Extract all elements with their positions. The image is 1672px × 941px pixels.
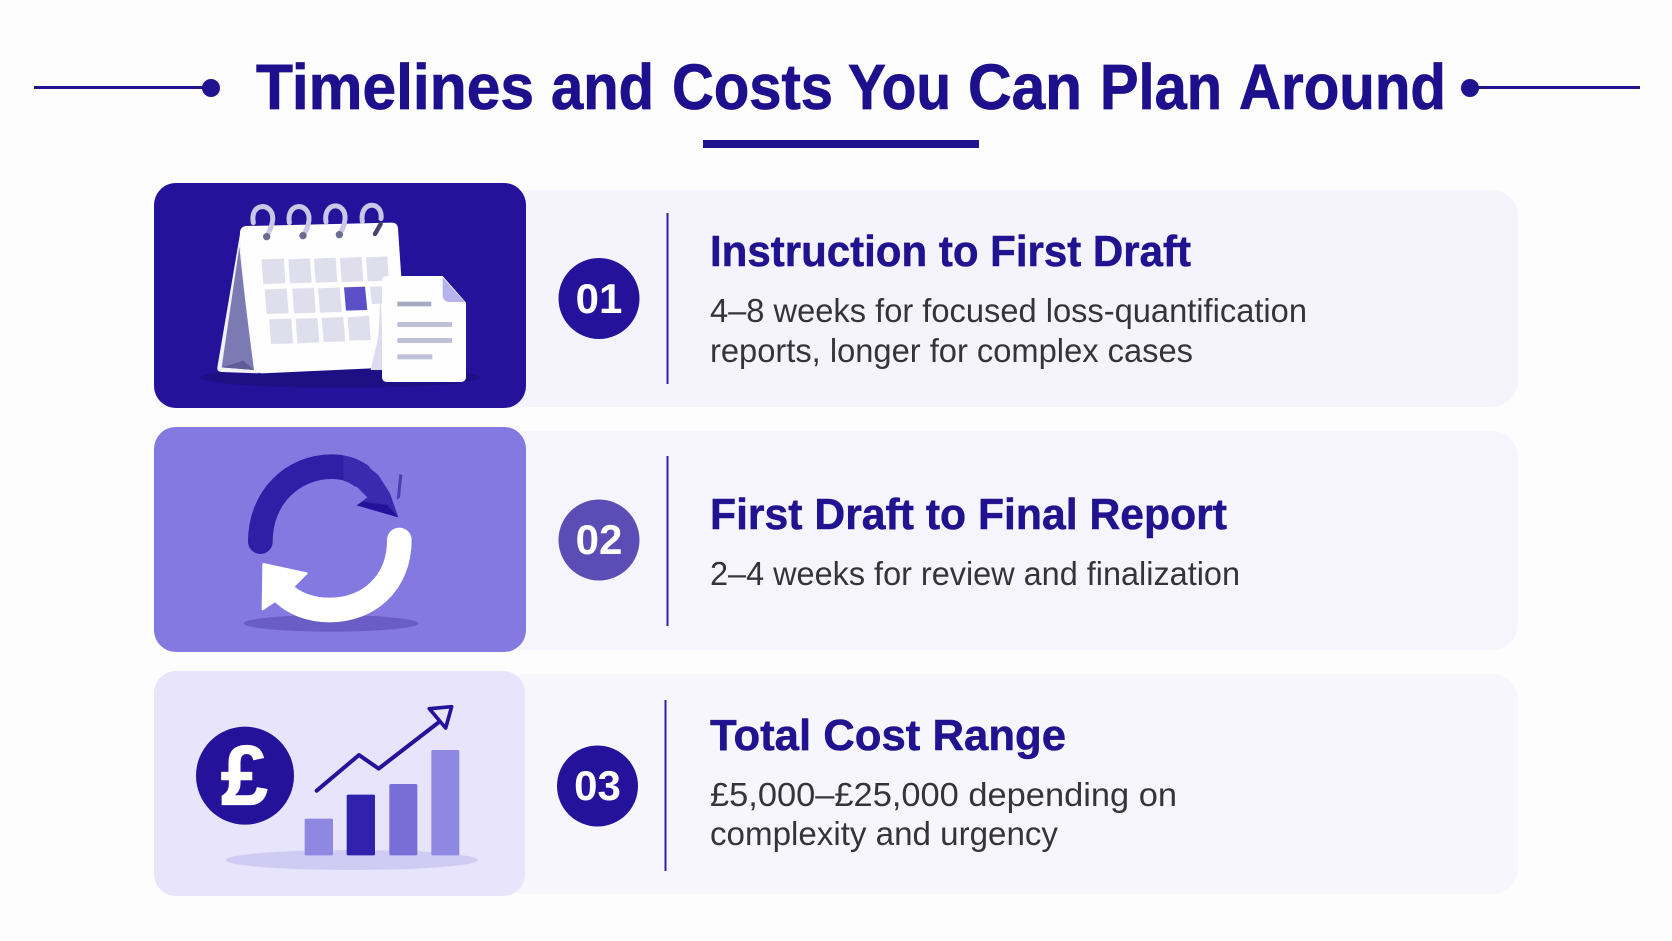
title: [256, 51, 1446, 123]
row 1 number badge: 01: [576, 275, 622, 322]
row 3 divider: [664, 700, 666, 871]
title: Around: [1239, 51, 1446, 123]
panel: row 1 instruction to first draft: [154, 183, 1518, 408]
title ornament: left line and dot: [34, 79, 220, 97]
row 1 body text: [710, 292, 1307, 369]
panel: row 3 total cost range: [154, 671, 1518, 896]
row 2 body text: 2–4 weeks for review and finalization: [710, 555, 1240, 592]
row 1 number badge: [558, 258, 640, 339]
title: Can: [968, 51, 1082, 123]
row 3 icon tile: pound and growth chart: [154, 671, 525, 896]
row 3 heading: Total Cost Range: [710, 711, 1066, 760]
row 2 heading: First Draft to Final Report: [710, 490, 1227, 539]
title: Timelines: [256, 51, 534, 123]
row 1 icon tile: calendar and document: [154, 183, 526, 408]
row 2 icon tile: refresh arrows: [154, 427, 526, 652]
title: Plan: [1100, 51, 1222, 123]
row 3 background: [500, 674, 1518, 894]
row 3 number badge: [557, 746, 638, 826]
row 3 icon tile: pound and growth chart: £: [221, 729, 268, 823]
row 3 body text: £5,000–£25,000 depending on: [710, 776, 1177, 813]
row 2 divider: [666, 456, 668, 626]
title: You: [848, 51, 951, 123]
row 2 background: [500, 431, 1518, 650]
row 1 background: [500, 190, 1518, 407]
row 2 number badge: 02: [576, 516, 622, 563]
row 3 body text: complexity and urgency: [710, 815, 1058, 852]
title ornament: right line and dot: [1461, 79, 1640, 97]
row 3 number badge: 03: [574, 762, 621, 809]
row 3 body text: [710, 776, 1177, 852]
title underline: [703, 140, 979, 148]
panel: row 2 first draft to final report: [154, 427, 1518, 652]
row 1 body text: 4–8 weeks for focused loss-quantification: [710, 292, 1307, 329]
title: and: [551, 51, 654, 123]
row 1 divider: [666, 213, 668, 384]
row 2 number badge: [558, 500, 640, 580]
title: Costs: [672, 51, 833, 123]
row 1 body text: reports, longer for complex cases: [710, 332, 1193, 369]
row 1 heading: Instruction to First Draft: [710, 227, 1191, 276]
